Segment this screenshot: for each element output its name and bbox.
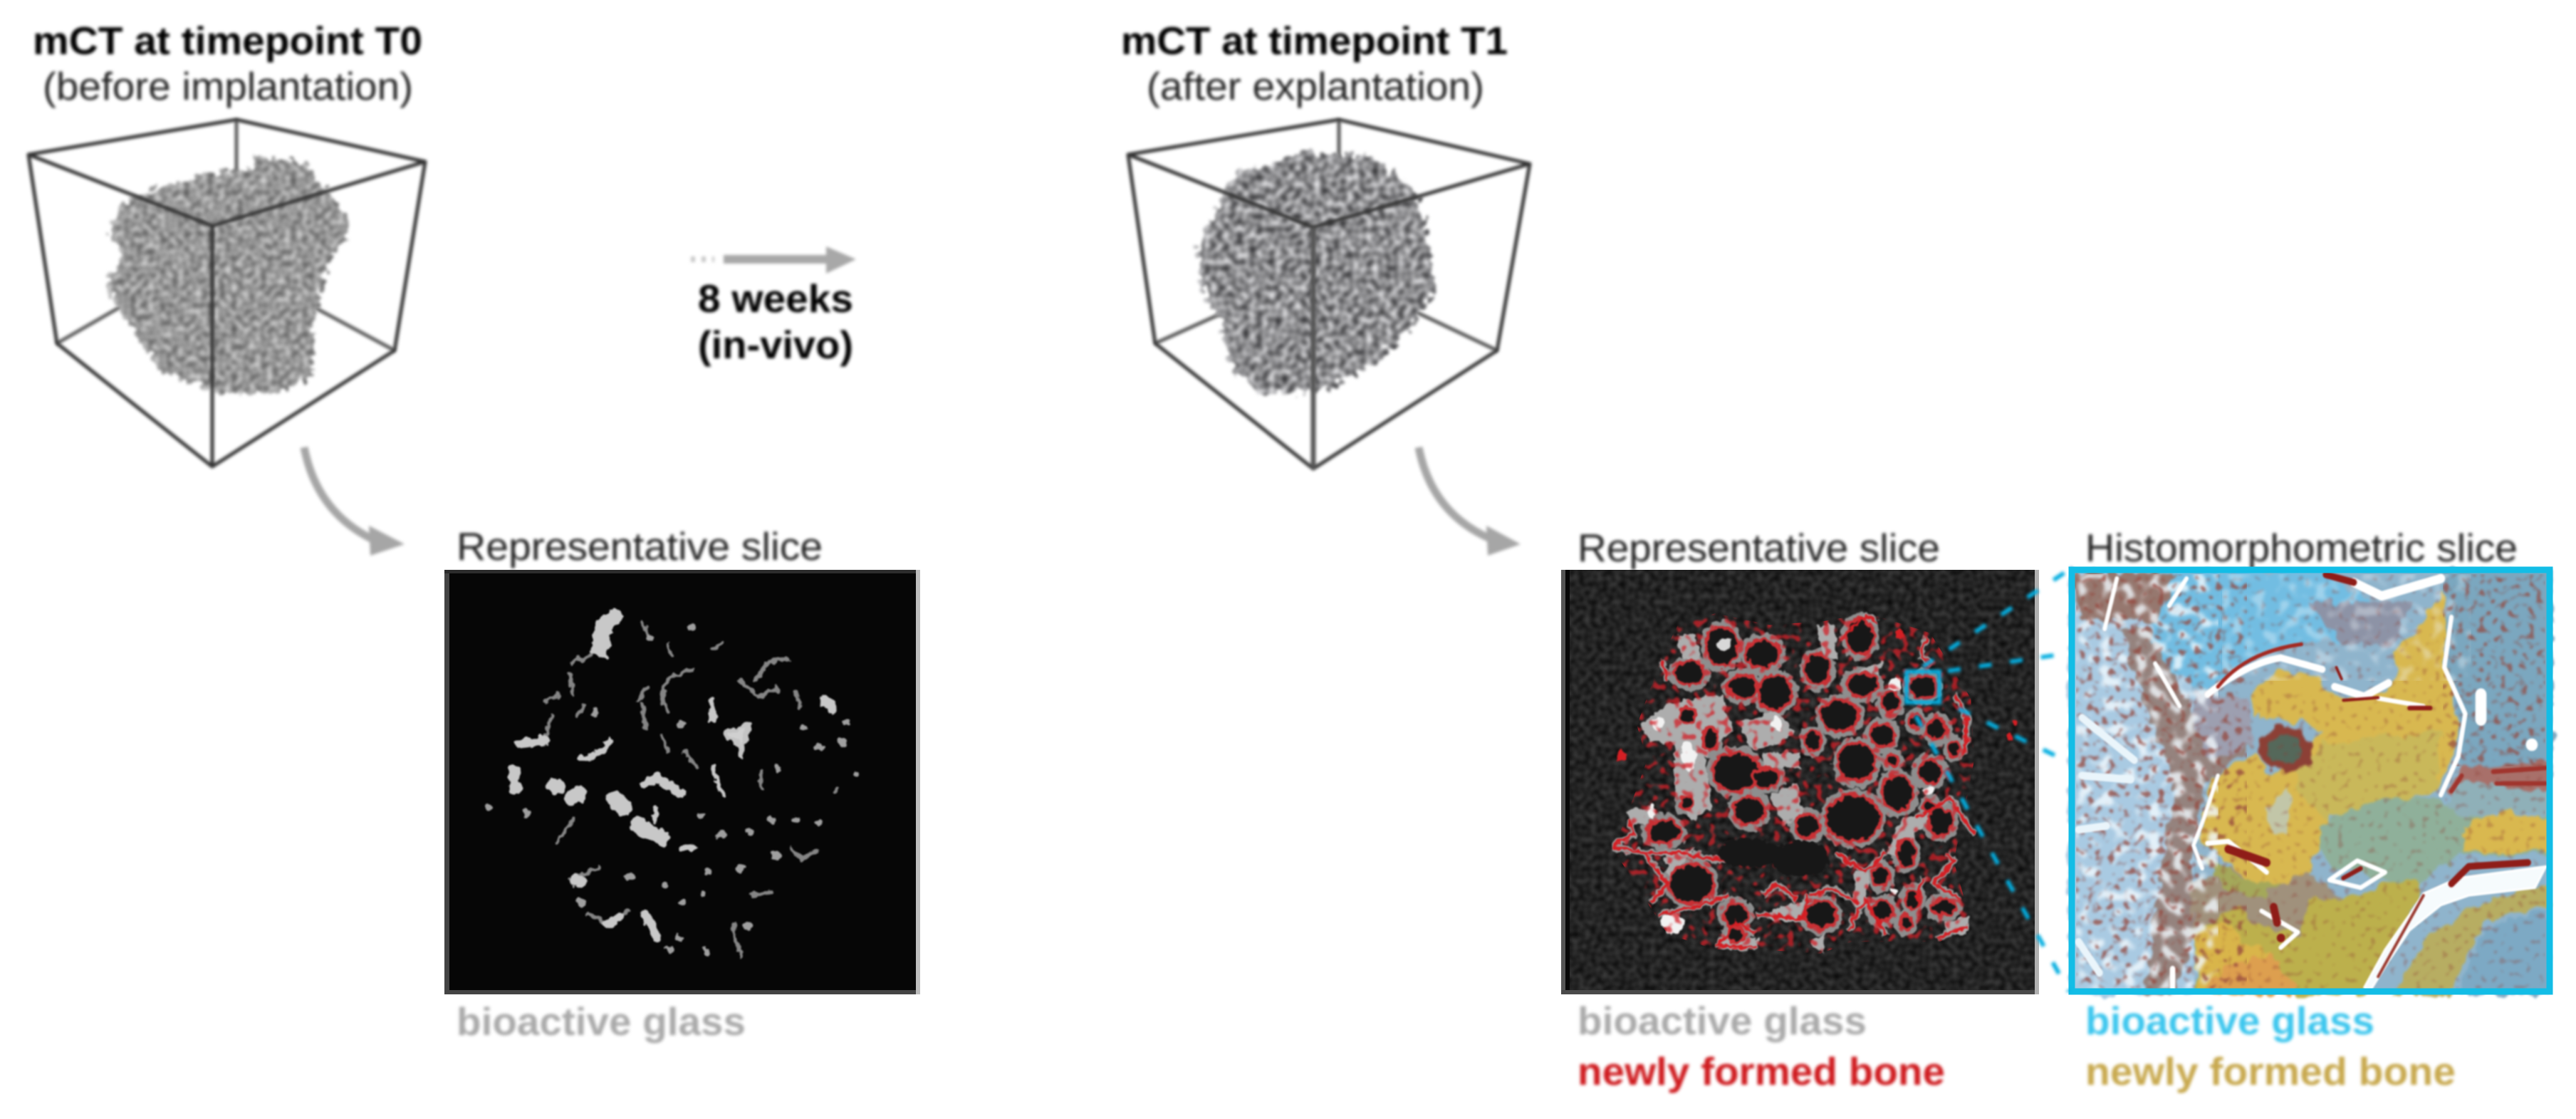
- panel: T0 representative slice: [444, 524, 920, 1043]
- legend: bioactive glass: bioactive glass: [457, 999, 746, 1043]
- arrow: 8 weeks timeline: [691, 246, 856, 367]
- panel: histomorphometric slice: [2069, 526, 2552, 1093]
- arrow: T0 cube to slice: [304, 447, 405, 556]
- panel: T1 micro-CT: [1121, 19, 1530, 556]
- legend: bioactive glass cyan: bioactive glass: [2085, 999, 2374, 1043]
- heading: Representative slice T1: Representative slice: [1578, 526, 1940, 570]
- image: histology section: [2069, 568, 2552, 994]
- panel: T0 micro-CT: [28, 19, 425, 556]
- icon: T0 bounding cube with scaffold: [28, 120, 425, 467]
- legend: newly formed bone red: newly formed bone: [1578, 1049, 1945, 1093]
- panel: T1 representative slice: [1561, 526, 2039, 1093]
- heading: mCT at timepoint T1: [1121, 19, 1508, 108]
- heading: mCT at timepoint T0: [33, 19, 422, 108]
- heading: mCT at timepoint T0: (before implantation): [43, 64, 413, 108]
- legend: bioactive glass T1: bioactive glass: [1578, 999, 1867, 1043]
- legend: newly formed bone ochre: newly formed bone: [2085, 1049, 2456, 1093]
- heading: Histomorphometric slice: Histomorphometric slice: [2085, 526, 2518, 570]
- image: T1 CT slice with bone overlay: [1561, 570, 2039, 994]
- heading: mCT at timepoint T1: mCT at timepoint T1: [1121, 19, 1508, 63]
- text: 8 weeks (in-vivo): (in-vivo): [698, 323, 853, 367]
- image: T0 CT slice: [444, 570, 920, 994]
- callout: zoom box and dashed connectors: [1907, 570, 2069, 992]
- icon: T1 bounding cube with scaffold: [1128, 120, 1530, 469]
- heading: mCT at timepoint T0: mCT at timepoint T0: [33, 19, 422, 63]
- heading: mCT at timepoint T1: (after explantation): [1147, 64, 1484, 108]
- arrow: T1 cube to slice: [1419, 447, 1521, 556]
- heading: Representative slice T0: Representative slice: [457, 524, 823, 568]
- text: 8 weeks (in-vivo): 8 weeks: [698, 276, 853, 321]
- text: 8 weeks (in-vivo): [698, 276, 853, 367]
